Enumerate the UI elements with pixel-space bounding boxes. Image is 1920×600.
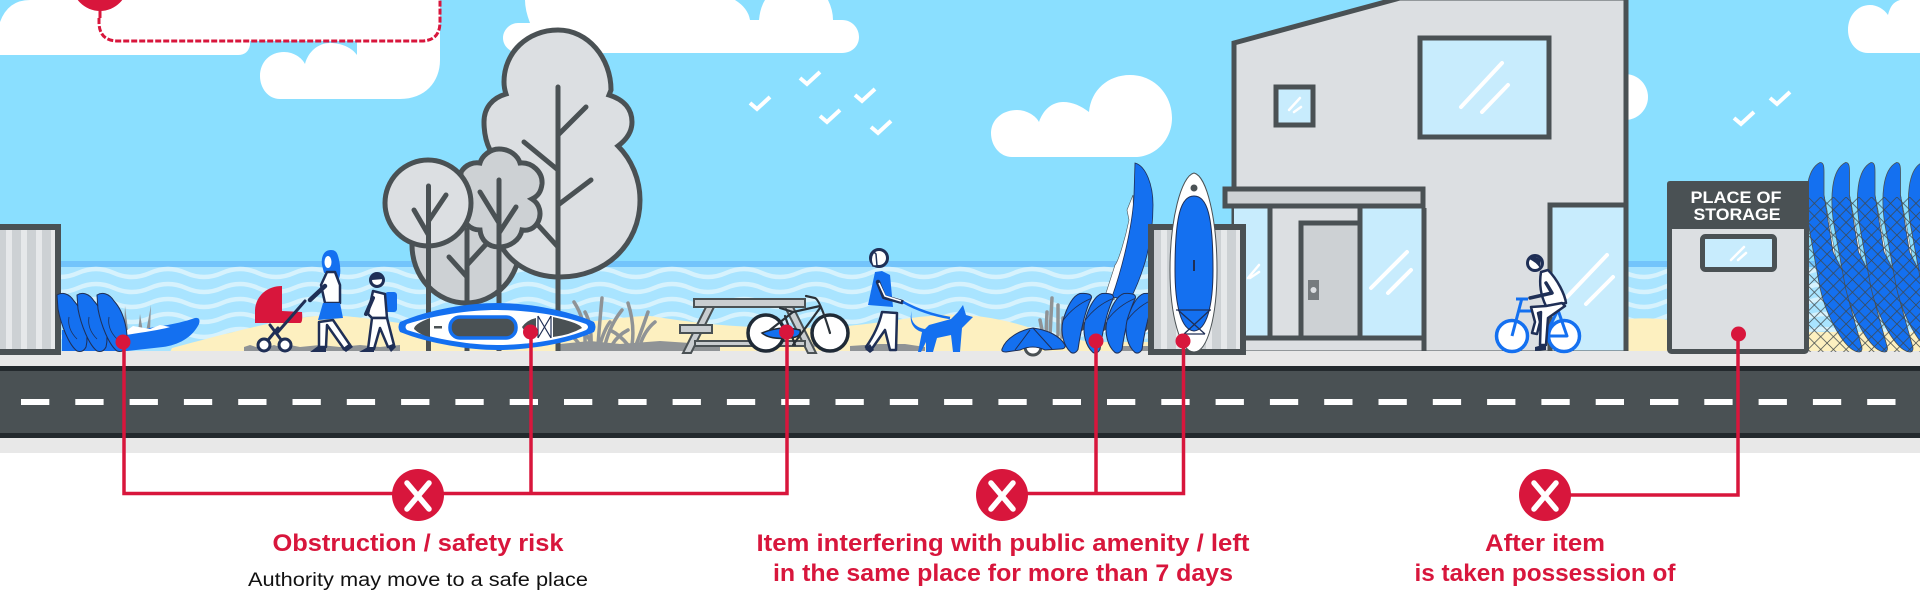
child (359, 274, 397, 352)
cyclist (1496, 256, 1580, 352)
cloud: below callout (260, 30, 440, 99)
house body (1234, 0, 1626, 353)
blue boards behind fence (1806, 162, 1920, 352)
right ground window (1550, 205, 1626, 353)
dog (911, 305, 973, 352)
connector: storage (1545, 326, 1746, 495)
person with pram (255, 250, 397, 352)
cloud: behind house (1602, 74, 1648, 120)
text: amenity heading: in the same place for more than 7 days (773, 560, 1233, 587)
stand up paddle board (1170, 173, 1217, 352)
bicycle with kayak (748, 296, 848, 351)
callout box (72, 0, 440, 41)
walker (865, 250, 902, 353)
sky background (0, 0, 1920, 355)
kayak cluster (1002, 163, 1156, 355)
sign header: STORAGE (1694, 205, 1780, 224)
text: possession heading: After item (1485, 530, 1605, 557)
place of storage building (1667, 181, 1809, 352)
shed left (0, 227, 58, 352)
tree: large (484, 30, 640, 352)
awning (1225, 189, 1423, 206)
sand dunes (170, 315, 1920, 354)
text: amenity heading: Item interfering with public amenity / left (756, 530, 1250, 557)
cloud: top left (0, 0, 250, 55)
sign header (1667, 181, 1809, 229)
pedestrian path (0, 351, 1920, 366)
house (1225, 0, 1626, 353)
connector: public amenity (1002, 334, 1190, 494)
text: obstruction note: Authority may move to a safe place (248, 570, 588, 591)
entry step (1234, 338, 1424, 353)
text: possession heading: is taken possession of (1414, 560, 1677, 587)
tree: small round (385, 160, 471, 352)
connector: obstruction (116, 324, 794, 494)
pram (255, 286, 305, 351)
icon: cross 1 (392, 469, 444, 521)
picnic table (680, 299, 816, 353)
small upper window (1276, 87, 1313, 125)
chain link fence (1808, 197, 1920, 352)
woman (310, 250, 353, 352)
leash (903, 302, 950, 318)
text: obstruction heading: Obstruction / safety risk (272, 530, 564, 557)
ground floor front (1234, 208, 1424, 353)
beached kayak and stacked hulls (57, 293, 200, 352)
large upper window (1420, 38, 1549, 137)
cloud: centre right (991, 75, 1172, 157)
icon: cross 3 (1519, 469, 1571, 521)
cloud: top right (1848, 0, 1920, 53)
kerb below road (0, 438, 1920, 453)
person walking dog (865, 250, 973, 353)
storage window (1702, 236, 1774, 270)
birds (750, 72, 1790, 133)
rider (1528, 256, 1566, 351)
tree: scalloped (461, 149, 542, 352)
road (0, 366, 1920, 438)
tall kayak (1106, 163, 1153, 300)
grass (124, 298, 1150, 352)
door (1301, 223, 1360, 338)
sign header: PLACE OF (1690, 188, 1782, 207)
shed centre (1151, 227, 1243, 352)
upturned hull (1002, 328, 1065, 352)
cloud: top centre (503, 0, 859, 53)
icon: cross 2 (976, 469, 1028, 521)
kayak lying in front of trees (398, 303, 596, 350)
tree: mid back (412, 187, 520, 352)
sea (0, 261, 1920, 355)
blue bicycle (1496, 298, 1580, 352)
